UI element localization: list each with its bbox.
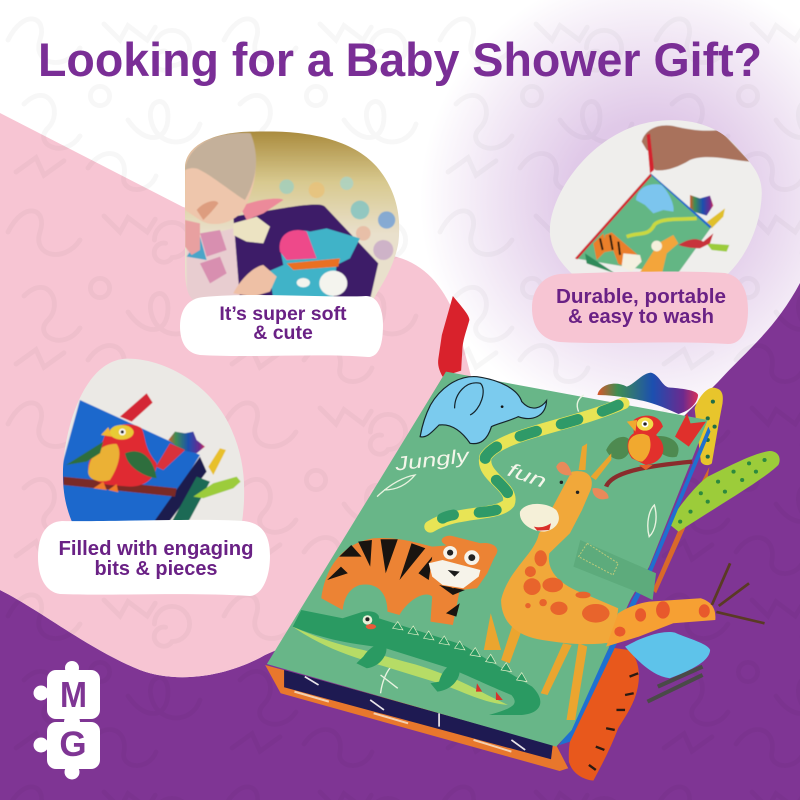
green tag bbox=[668, 451, 780, 532]
book title lettering: Jungly bbox=[393, 445, 472, 476]
foliage marks bbox=[377, 395, 656, 693]
photo: baby with soft book bbox=[180, 130, 407, 303]
caption: engaging bits and pieces: bits & pieces bbox=[94, 558, 218, 580]
tiger tail bbox=[569, 647, 639, 781]
tiger bbox=[321, 536, 498, 625]
pink background shape bbox=[0, 113, 472, 677]
product: jungle cloth book bbox=[265, 296, 780, 781]
caption: super soft bbox=[180, 295, 383, 357]
orange inner page side bbox=[653, 467, 709, 593]
book title lettering: fun bbox=[505, 459, 549, 493]
photo: parrot page with tags bbox=[57, 357, 250, 527]
book title lettering bbox=[393, 445, 549, 493]
logo piece: M: M bbox=[60, 674, 87, 715]
yellow tag bbox=[695, 388, 723, 465]
logo: MG puzzle pieces bbox=[34, 661, 100, 780]
caption: super soft: It’s super soft bbox=[219, 303, 347, 325]
caption: durable and portable: & easy to wash bbox=[568, 306, 714, 328]
parrot bbox=[606, 413, 706, 487]
logo piece: G: G bbox=[59, 725, 87, 764]
star tag bbox=[598, 373, 698, 414]
red spine edge bbox=[346, 372, 446, 537]
crocodile bbox=[293, 610, 540, 715]
caption: engaging bits and pieces bbox=[38, 520, 270, 596]
photo: hand holding book bbox=[547, 117, 767, 277]
caption: super soft: & cute bbox=[253, 322, 313, 344]
purple background shape bbox=[0, 283, 800, 800]
elephant bbox=[420, 377, 547, 444]
caption: durable and portable bbox=[532, 271, 748, 344]
giraffe bbox=[484, 443, 618, 720]
inner pages bbox=[265, 665, 568, 771]
caption: engaging bits and pieces: Filled with engaging bbox=[58, 538, 253, 560]
red tab bbox=[438, 296, 469, 377]
giraffe tail tag bbox=[606, 563, 765, 647]
snake bbox=[430, 403, 623, 527]
title: Looking for a Baby Shower Gift? bbox=[38, 33, 762, 86]
green cover bbox=[267, 372, 708, 747]
blue right edge bbox=[559, 427, 710, 745]
blue plush tag bbox=[625, 632, 710, 702]
soft purple glow behind top-right photo bbox=[420, 0, 800, 440]
velcro strap bbox=[573, 540, 656, 600]
caption: durable and portable: Durable, portable bbox=[556, 286, 726, 308]
